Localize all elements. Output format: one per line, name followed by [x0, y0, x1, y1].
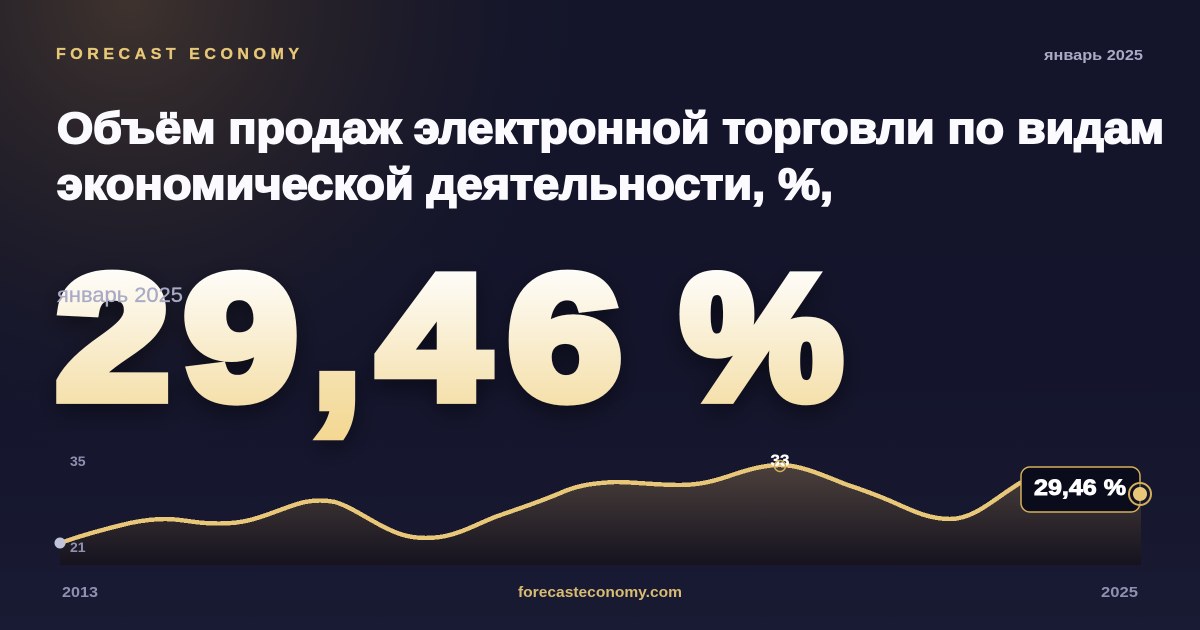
value callout: [1021, 467, 1140, 512]
axis min label: 21: [70, 539, 86, 555]
x axis start year: 2013: [62, 584, 98, 601]
date top right: январь 2025: [1044, 47, 1143, 64]
footer site: forecasteconomy.com: [518, 584, 682, 601]
end marker: [1129, 483, 1151, 505]
big value: ,: [313, 236, 361, 446]
brand label: FORECAST ECONOMY: [56, 46, 299, 63]
value callout: 29,46 %: [1034, 475, 1126, 500]
start point: [54, 538, 66, 548]
x axis end year: 2025: [1101, 584, 1138, 601]
date under title: январь 2025: [57, 284, 183, 307]
title: [57, 104, 1164, 209]
big value: 4: [378, 239, 489, 435]
big value: 2: [56, 240, 169, 436]
title: Объём продаж электронной торговли по видам: [57, 104, 1164, 153]
axis max label: 35: [70, 453, 86, 469]
peak marker: [774, 460, 786, 472]
title: экономической деятельности, %,: [57, 160, 833, 209]
chart area: [60, 465, 1141, 565]
big value: 6: [508, 240, 621, 436]
big value: [56, 236, 842, 446]
chart line: [60, 465, 1140, 543]
big value: %: [681, 239, 842, 435]
big value: 9: [184, 240, 297, 436]
peak label: 33: [771, 451, 789, 470]
line chart: [54, 451, 1151, 565]
